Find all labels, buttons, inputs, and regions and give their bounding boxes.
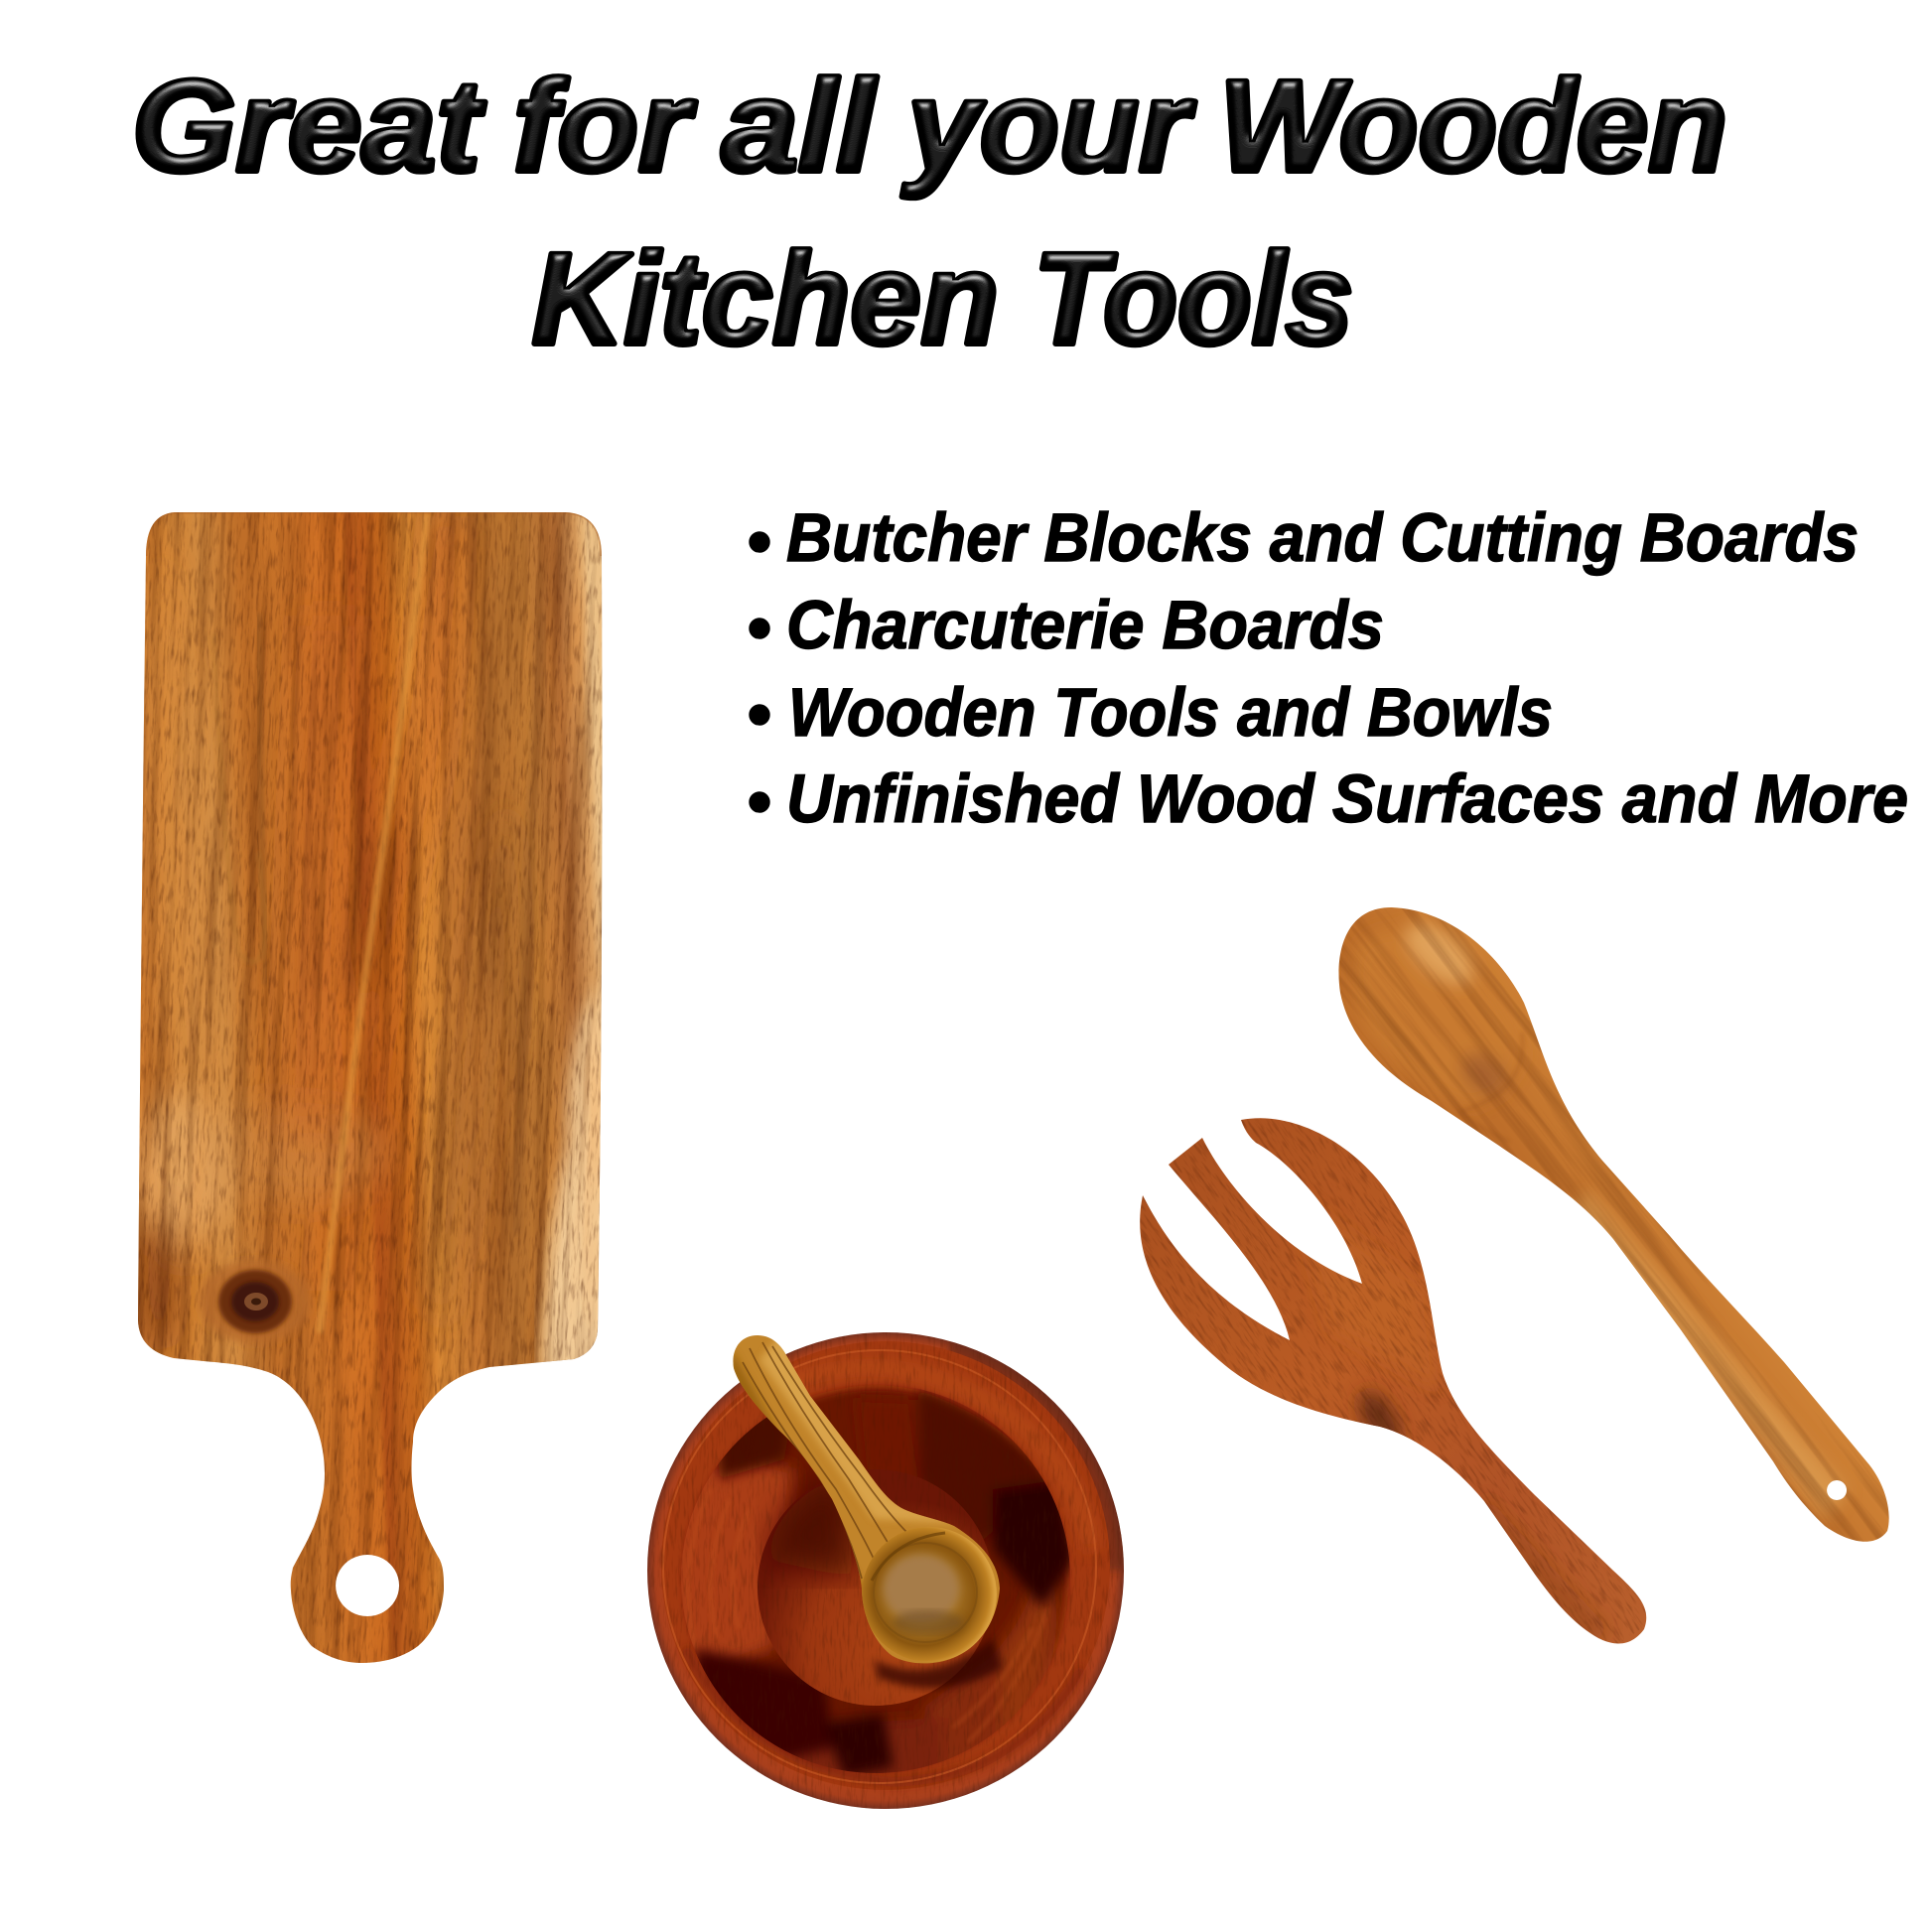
title: Kitchen bbox=[532, 225, 999, 371]
bullet list: Charcuterie Boards bbox=[786, 587, 1384, 663]
title bbox=[132, 53, 1727, 371]
bowl interior staves bbox=[668, 1390, 1074, 1787]
cutting board bbox=[138, 512, 602, 1663]
small ladle bbox=[725, 1330, 1013, 1668]
title: Wooden bbox=[1219, 53, 1727, 199]
salad bowl bbox=[647, 1332, 1124, 1809]
bullet list: Wooden Tools and Bowls bbox=[788, 674, 1553, 751]
title: all bbox=[722, 53, 878, 199]
knot bbox=[200, 1260, 311, 1343]
bullet list bbox=[750, 499, 1908, 837]
title: Great bbox=[132, 53, 486, 199]
title: your bbox=[901, 53, 1195, 199]
bowl floor bbox=[758, 1469, 994, 1706]
wooden spoon bbox=[1253, 907, 1889, 1634]
title: Tools bbox=[1034, 225, 1353, 371]
bullet list: Butcher Blocks and Cutting Boards bbox=[786, 499, 1859, 576]
fork server bbox=[1140, 907, 1886, 1644]
title: for bbox=[513, 53, 696, 199]
sapwood patch on the lower right edge bbox=[534, 982, 602, 1362]
